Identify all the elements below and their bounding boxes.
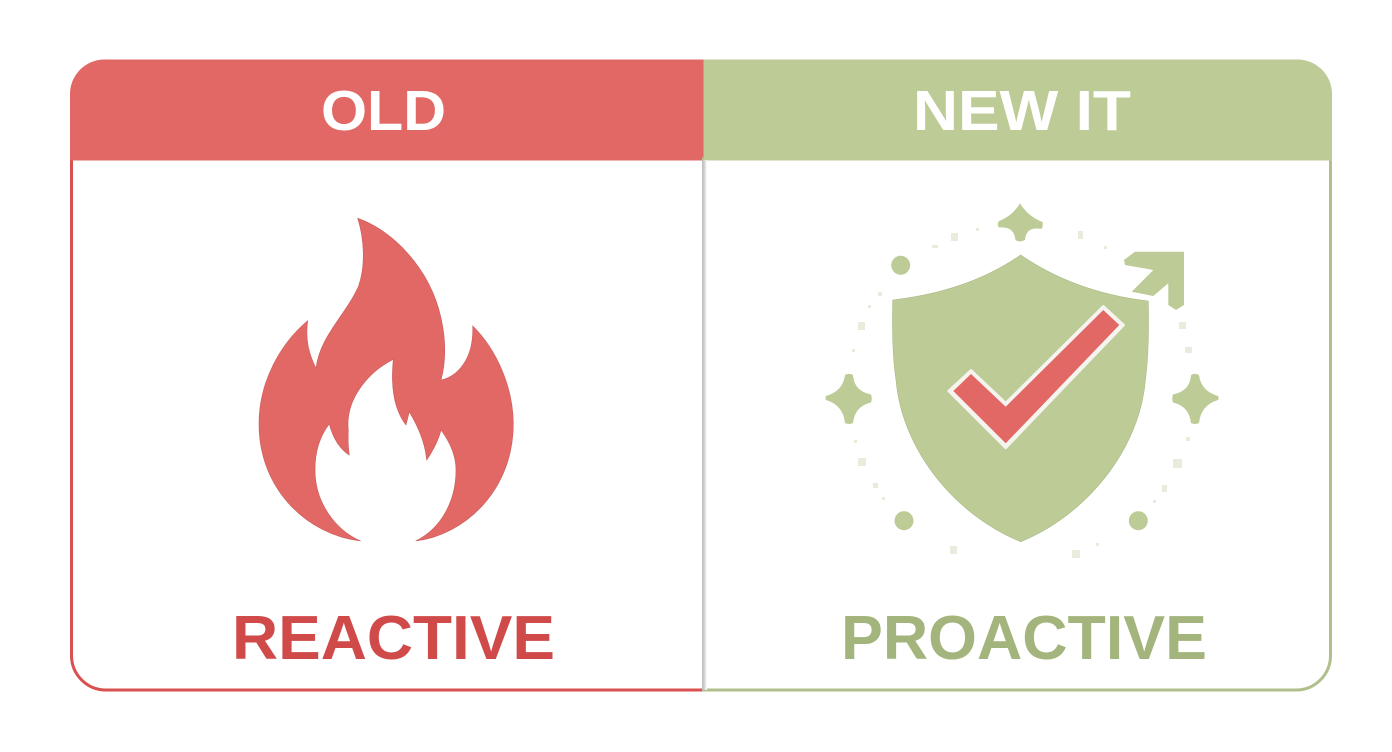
icon: dot top left — [891, 256, 910, 275]
panel: new IT proactive — [704, 60, 1332, 690]
icon: sparkle top — [998, 203, 1043, 242]
icon: dot bottom right — [1129, 511, 1148, 530]
faint orbit dots — [852, 228, 1192, 558]
icon: sparkle right — [1172, 374, 1218, 424]
label: PROACTIVE: PROACTIVE — [841, 604, 1207, 673]
icon: sparkle left — [826, 374, 872, 424]
icon: check mark — [948, 306, 1124, 448]
check fill — [953, 310, 1119, 443]
panel body: old — [72, 159, 704, 690]
header bar: old — [70, 60, 704, 160]
heading: NEW IT: NEW IT — [913, 79, 1131, 143]
icon: dot bottom left — [894, 511, 914, 530]
icon: arrow up right — [1124, 252, 1184, 310]
panel: old reactive — [70, 60, 704, 690]
header bar: new — [704, 60, 1332, 160]
center divider — [702, 160, 707, 690]
label: REACTIVE: REACTIVE — [232, 604, 555, 673]
icon: shield — [892, 255, 1149, 542]
heading: OLD: OLD — [321, 79, 446, 143]
panel body: new — [704, 159, 1330, 690]
check outline — [948, 306, 1124, 448]
icon: flame — [259, 218, 513, 541]
